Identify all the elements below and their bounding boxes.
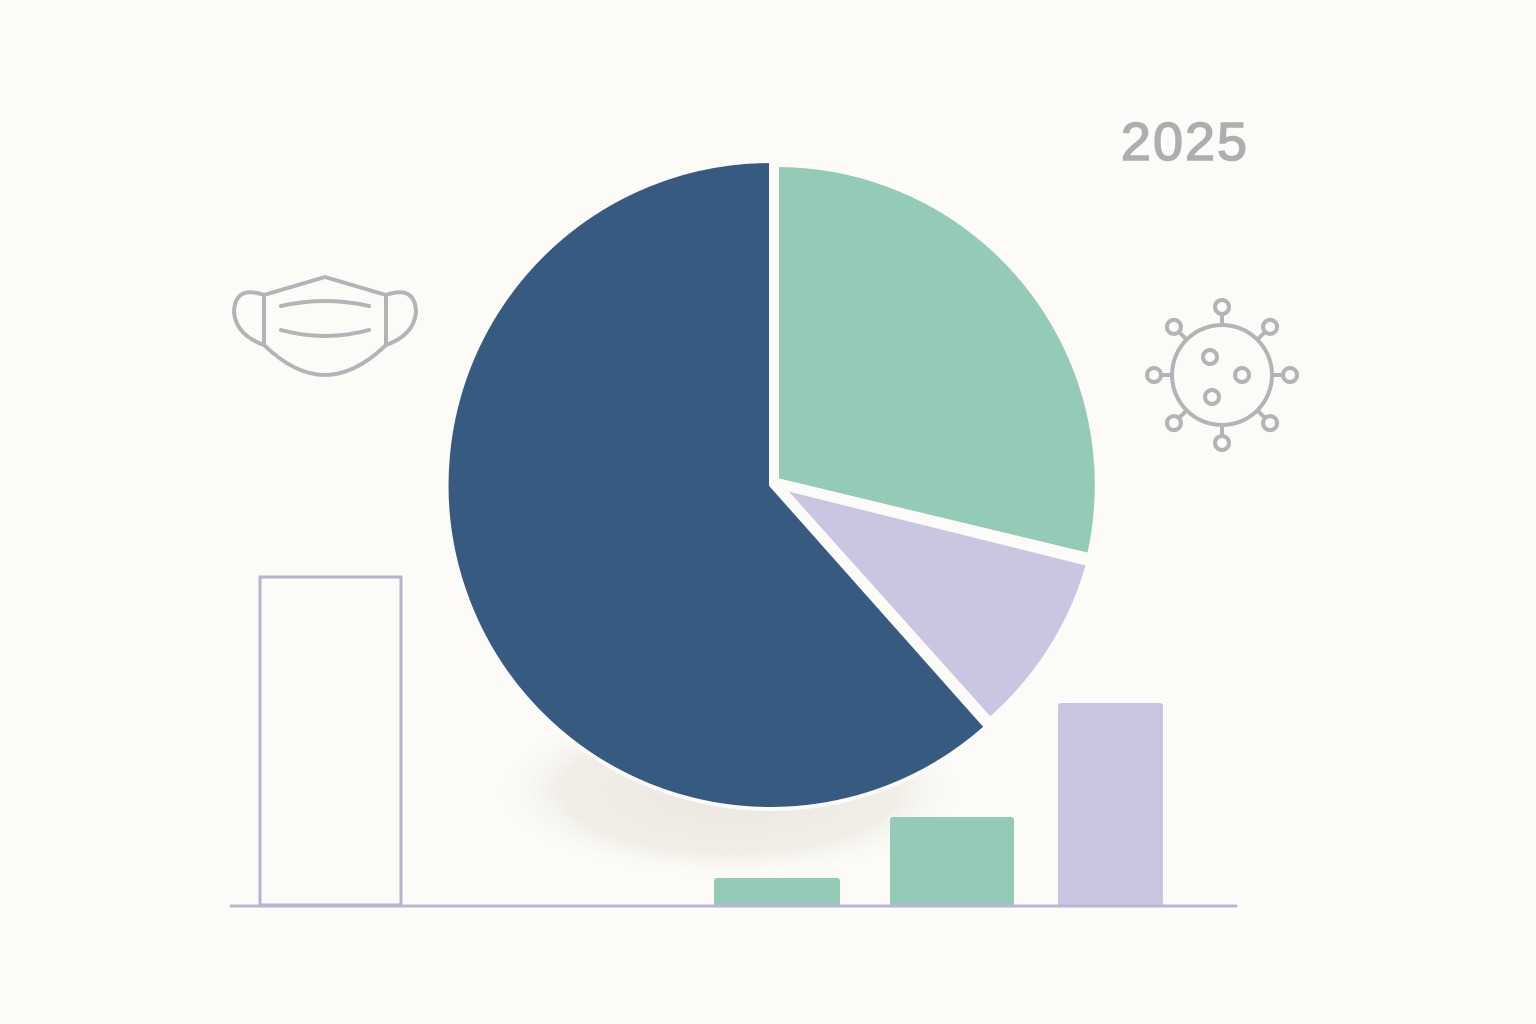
pie chart [447, 161, 1097, 809]
bar chart [231, 577, 1236, 906]
icon: face mask [234, 277, 416, 375]
pie shadow [490, 700, 970, 880]
year label: 2025 [1121, 112, 1249, 172]
icon: virus [1147, 300, 1297, 450]
